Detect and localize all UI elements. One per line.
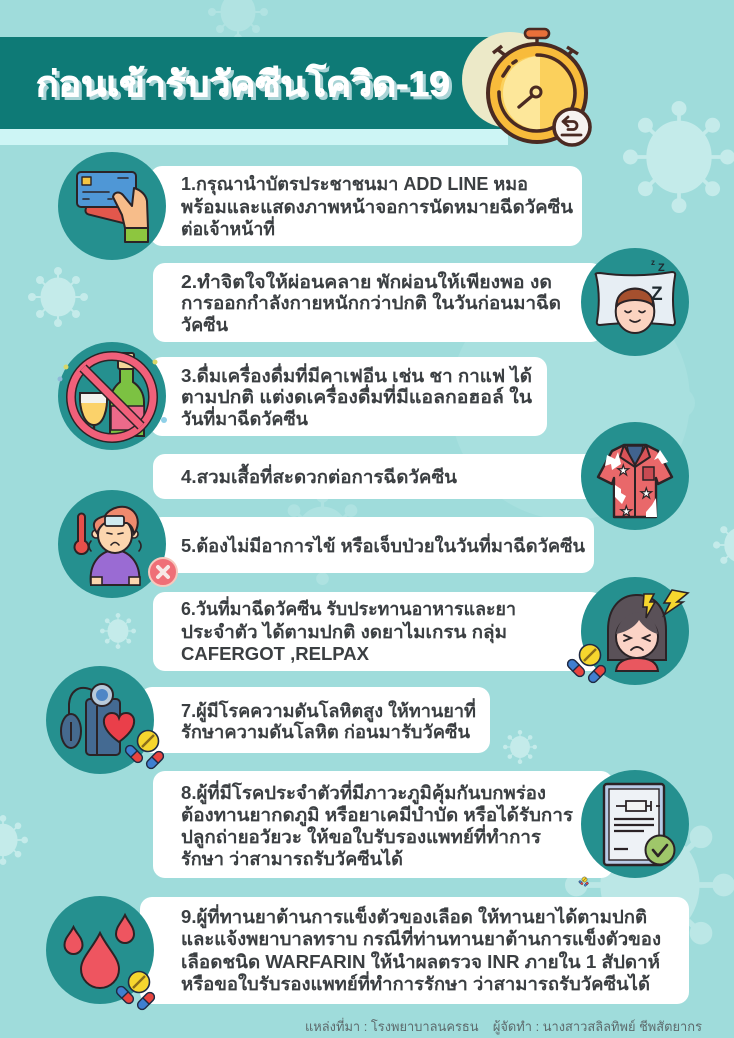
circle 5 (58, 490, 166, 598)
icon: headache girl (608, 590, 688, 671)
icon: pills (566, 644, 607, 684)
text 2: 2.ทำจิตใจให้ผ่อนคลาย พักผ่อนให้เพียงพอ งด (181, 271, 552, 292)
text 1: ต่อเจ้าหน้าที่ (181, 216, 275, 239)
icon: pills (124, 730, 165, 770)
text 2: การออกกำลังกายหนักกว่าปกติ ในวันก่อนมาฉีด (181, 292, 561, 313)
panel: item 7 (46, 666, 490, 774)
text 3: วันที่มาฉีดวัคซีน (181, 406, 309, 429)
icon: shirt (598, 445, 672, 520)
text 1: 1.กรุณานำบัตรประชาชนมา ADD LINE หมอ (181, 174, 528, 196)
card 3 (150, 357, 547, 436)
circle 4 (581, 422, 689, 530)
text 7 (181, 698, 476, 742)
card 2 (153, 263, 603, 342)
icon: sleeping head on pillow: Z (651, 284, 663, 305)
circle 9 (46, 896, 154, 1004)
text 5: 5.ต้องไม่มีอาการไข้ หรือเจ็บป่วยในวันที่มาฉีดวัคซีน (181, 533, 586, 556)
text 3: 3.ดื่มเครื่องดื่มที่มีคาเฟอีน เช่น ชา กาแฟ ได้ (181, 363, 532, 386)
card 5 (150, 517, 594, 573)
text 6: ประจำตัว ได้ตามปกติ งดยาไมเกรน กลุ่ม (181, 621, 507, 644)
text 7: รักษาความดันโลหิต ก่อนมารับวัคซีน (181, 721, 471, 742)
text 2: วัคซีน (181, 315, 229, 335)
text 1: พร้อมและแสดงภาพหน้าจอการนัดหมายฉีดวัคซีน (181, 197, 574, 217)
panel: item 9 (46, 896, 689, 1011)
icon: medical certificate (604, 784, 674, 865)
text 7: 7.ผู้มีโรคความดันโลหิตสูง ให้ทานยาที่ (181, 698, 476, 723)
footer credits: แหล่งที่มา : โรงพยาบาลนครธน ผู้จัดทำ : นางสาวสลิลทิพย์ ชีพสัตยากร (305, 1018, 702, 1035)
circle 2 (581, 248, 689, 356)
text 9 (181, 904, 661, 994)
text 6 (181, 596, 516, 664)
text 8: ปลูกถ่ายอวัยวะ ให้ขอใบรับรองแพทย์ที่ทำการ (181, 824, 541, 849)
card 4 (153, 454, 603, 499)
icon: shirt: ★ (640, 486, 653, 502)
panel: item 4 (153, 422, 689, 530)
icon: sleeping head on pillow (596, 258, 675, 333)
title: ก่อนเข้ารับวัคซีนโควิด-19 (36, 63, 450, 104)
card 8 (153, 771, 613, 878)
circle 1 (58, 152, 166, 260)
icon: stopwatch (462, 29, 590, 145)
card 9 (140, 897, 689, 1004)
panel: item 3 (58, 342, 547, 450)
icon: sleeping head on pillow: z (651, 258, 655, 267)
text 9: และแจ้งพยาบาลทราบ กรณีที่ท่านทานยาต้านการแข็งตัวของ (181, 926, 661, 949)
text 9: เลือดชนิด WARFARIN ให้นำผลตรวจ INR ภายใน 1 สัปดาห์ (181, 951, 660, 972)
text 6: 6.วันที่มาฉีดวัคซีน รับประทานอาหารและยา (181, 596, 516, 619)
text 8: ต้องทานยากดภูมิ หรือยาเคมีบำบัด หรือได้รับการ (181, 804, 573, 827)
title: ก่อนเข้ารับวัคซีนโควิด-19 (39, 66, 453, 107)
icon: sleeping head on pillow: Z (658, 262, 665, 274)
icon: pills (115, 972, 156, 1011)
text 4: 4.สวมเสื้อที่สะดวกต่อการฉีดวัคซีน (181, 463, 458, 487)
circle 8 (581, 770, 689, 878)
text 8: รักษา ว่าสามารถรับวัคซีนได้ (181, 848, 403, 869)
card 6 (153, 592, 603, 671)
header band (0, 37, 510, 145)
circle 7 (46, 666, 154, 774)
icon: shirt: ★ (617, 463, 630, 479)
panel: item 1 (58, 152, 582, 260)
text 8 (181, 780, 573, 869)
icon: feverish person (74, 507, 141, 585)
text 6: CAFERGOT ,RELPAX (181, 644, 369, 664)
circle 3 (58, 342, 166, 450)
panel: item 8 (153, 770, 689, 887)
icon: ID card in hand (77, 172, 148, 242)
panel: item 5 (58, 490, 594, 598)
card 7 (140, 687, 490, 753)
panel: item 6 (153, 577, 689, 685)
text 1 (181, 174, 574, 239)
icon: tiny pills (578, 877, 589, 887)
icon: blood pressure monitor (61, 684, 134, 755)
text 9: 9.ผู้ที่ทานยาต้านการแข็งตัวของเลือด ให้ทานยาได้ตามปกติ (181, 904, 647, 929)
icon: cross badge (149, 558, 177, 586)
icon: shirt: ★ (620, 504, 633, 520)
text 9: หรือขอใบรับรองแพทย์ที่ทำการรักษา ว่าสามารถรับวัคซีนได้ (181, 971, 650, 994)
icon: blood drops (64, 915, 134, 988)
text 3 (181, 363, 533, 429)
circle 6 (581, 577, 689, 685)
text 8: 8.ผู้ที่มีโรคประจำตัวที่มีภาวะภูมิคุ้มกันบกพร่อง (181, 780, 546, 805)
card 1 (150, 166, 582, 246)
icon: no alcohol (58, 353, 167, 438)
text 2 (181, 271, 561, 335)
panel: item 2 (153, 248, 689, 356)
text 3: ตามปกติ แต่งดเครื่องดื่มที่มีแอลกอฮอล์ ใน (181, 384, 533, 407)
